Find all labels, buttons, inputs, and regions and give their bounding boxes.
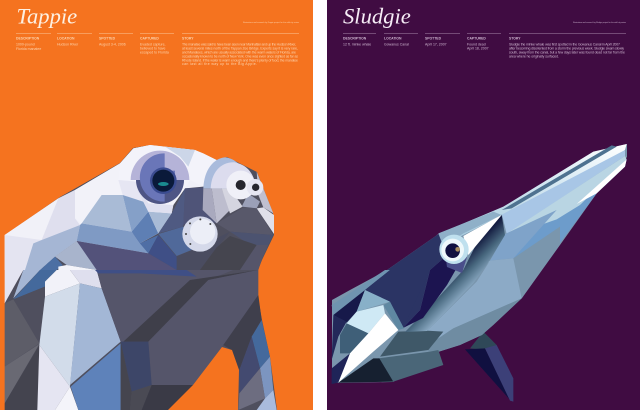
text block: description xyxy=(16,36,41,51)
gap between the manatee legs xyxy=(168,347,239,410)
whale body base xyxy=(332,144,627,383)
icon: whale eye xyxy=(438,212,502,264)
text block: location: LOCATION xyxy=(57,36,75,40)
text block: spotted: SPOTTED xyxy=(425,36,442,40)
manatee flipper and belly facets xyxy=(5,270,277,410)
credit line: Illustrations and research by Sludgie project for the wild city series xyxy=(573,21,626,24)
text block: story: Sludgie the minke whale was first spotted in the Gowanus Canal in April 2007 xyxy=(509,42,620,46)
text block: spotted xyxy=(425,36,447,46)
text block: captured: Found dead xyxy=(467,42,486,46)
text block: description xyxy=(343,36,371,46)
text block: story: area where he originally surfaced. xyxy=(509,54,559,58)
text block: description: DESCRIPTION xyxy=(16,36,40,40)
text block: spotted: August 3-4, 2006 xyxy=(99,42,126,46)
text block: captured: April 18, 2007 xyxy=(467,46,489,50)
rules xyxy=(343,32,626,34)
manatee body base xyxy=(5,145,277,410)
whale mid body facets xyxy=(427,210,560,352)
text block: description: 1000-pound xyxy=(16,42,35,46)
text block: story: The manatee was said to have been seen near Manhattan and up the Hudson River, xyxy=(182,42,296,46)
text block: description: Florida manatee xyxy=(16,47,41,51)
manatee upper body facets xyxy=(5,145,217,270)
panel: Sludgie header xyxy=(343,4,626,58)
text block: spotted xyxy=(99,36,126,46)
text block: description: DESCRIPTION xyxy=(343,36,367,40)
text block: story: occasionally known to be north of New York. One was even once sighted as far as xyxy=(182,54,298,58)
text block: story: STORY xyxy=(182,36,194,40)
rules xyxy=(16,32,299,34)
text block: location: LOCATION xyxy=(384,36,402,40)
whale snout facets xyxy=(437,144,627,258)
text block: captured: CAPTURED xyxy=(467,36,486,40)
text block: captured: escaped to Florida xyxy=(140,50,169,54)
text block: story: at least several miles north of the Tappan Zee Bridge. Experts say it is very rare, xyxy=(182,46,298,50)
text block: description: 12 ft. minke whale xyxy=(343,42,371,46)
text block: location xyxy=(384,36,409,46)
whale tail-end head facets xyxy=(332,270,430,384)
text block: story: after becoming disoriented from a storm the previous week. Sludgie swam slowly xyxy=(509,46,624,50)
text block: story: and Manatees, which are usually associated with the warm waters of Florida, are xyxy=(182,50,296,54)
icon: manatee nostril disc xyxy=(182,216,218,252)
icon: manatee small eyes xyxy=(203,157,263,199)
manatee head facets xyxy=(158,172,274,270)
title: Tappie: Tappie xyxy=(16,4,77,28)
text block: story xyxy=(182,36,298,66)
credit line: Illustrations and research by Tappie project for the wild city series xyxy=(243,21,299,24)
illustration: geometric manatee xyxy=(5,145,277,410)
text block: captured: CAPTURED xyxy=(140,36,159,40)
text block: story: STORY xyxy=(509,36,521,40)
whale flipper xyxy=(465,332,513,402)
text block: story: south, away from the canal, but a few days later was found dead not far from the xyxy=(509,50,625,54)
text block: story xyxy=(509,36,625,58)
text block: captured: Evaded capture, xyxy=(140,42,166,46)
panel: Sludgie poster background xyxy=(327,0,640,410)
text block: story: can last all the way up to the Big Apple. xyxy=(182,62,257,66)
text block: captured: believed to have xyxy=(140,46,166,50)
text block: spotted: April 17, 2007 xyxy=(425,42,447,46)
text block: location: Hudson River xyxy=(57,42,79,46)
title: Sludgie: Sludgie xyxy=(343,4,411,28)
whale lower jaw facets xyxy=(338,331,443,383)
text block: spotted: SPOTTED xyxy=(99,36,116,40)
panel: Tappie poster background xyxy=(0,0,313,410)
text block: location: Gowanus Canal xyxy=(384,42,409,46)
icon: manatee large eye xyxy=(131,151,189,204)
text block: captured xyxy=(467,36,489,50)
text block: story: Rhode Island. If the water is warm enough and there's plenty of food, the manatee xyxy=(182,58,298,62)
panel: Tappie header xyxy=(16,4,299,66)
illustration: geometric minke whale xyxy=(332,144,627,402)
whale dark head facets xyxy=(365,233,467,328)
whale throat fold xyxy=(405,215,505,332)
text block: captured xyxy=(140,36,169,54)
text block: location xyxy=(57,36,79,46)
